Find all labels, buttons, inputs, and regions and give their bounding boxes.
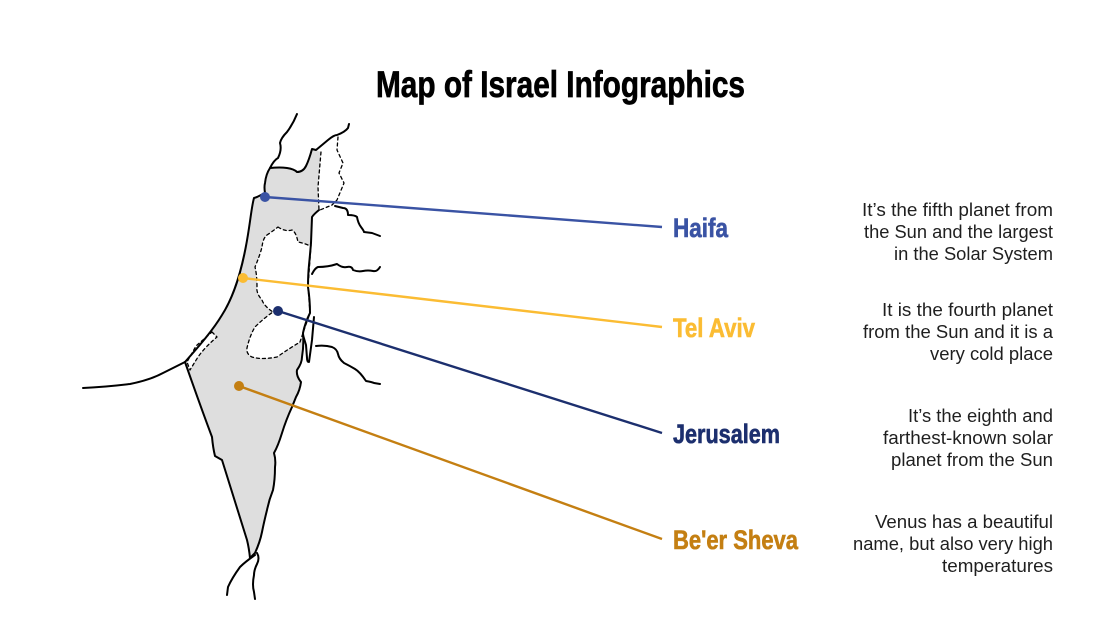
map: Gaza strip — [187, 332, 217, 370]
connector: Haifa — [260, 192, 662, 227]
map: middle river — [312, 264, 380, 274]
map: Dead Sea — [303, 317, 314, 362]
description: Haifa: in the Solar System — [894, 244, 1053, 264]
description: Haifa — [862, 200, 1053, 264]
title: Map of Israel Infographics — [376, 64, 745, 105]
map: Sinai tip right — [253, 553, 258, 599]
label: Haifa: Haifa — [673, 213, 729, 243]
map: northern river — [335, 206, 380, 236]
description: Haifa: the Sun and the largest — [864, 222, 1053, 242]
connector: Jerusalem — [273, 306, 662, 433]
map: northern border — [270, 114, 349, 172]
connector: Be'er Sheva — [234, 381, 662, 539]
description: Be'er Sheva: temperatures — [942, 556, 1053, 576]
map: Sinai tip left — [227, 555, 255, 595]
label: Tel Aviv: Tel Aviv — [673, 313, 755, 343]
map: eastern border — [185, 210, 319, 558]
map: West Bank — [247, 227, 311, 358]
map: Golan dashed border — [318, 137, 344, 210]
map of Israel — [83, 114, 380, 599]
connector: Tel Aviv — [238, 273, 662, 327]
description: Jerusalem: farthest-known solar — [883, 428, 1053, 448]
description: Tel Aviv — [863, 300, 1054, 364]
description: Jerusalem: It’s the eighth and — [908, 406, 1053, 426]
map: grey territory — [185, 149, 321, 558]
description: Jerusalem: planet from the Sun — [891, 450, 1053, 470]
description: Be'er Sheva: Venus has a beautiful — [875, 512, 1053, 532]
map: Egypt border — [83, 362, 185, 388]
label: Be'er Sheva: Be'er Sheva — [673, 525, 799, 555]
map: southern river — [316, 346, 380, 384]
description: Tel Aviv: from the Sun and it is a — [863, 322, 1054, 342]
map: coast and southern border — [185, 168, 270, 362]
description: Tel Aviv: It is the fourth planet — [882, 300, 1053, 320]
description: Haifa: It’s the fifth planet from — [862, 200, 1053, 220]
label: Jerusalem: Jerusalem — [673, 419, 780, 449]
description: Tel Aviv: very cold place — [930, 344, 1053, 364]
description: Be'er Sheva: name, but also very high — [853, 534, 1053, 554]
description: Be'er Sheva — [853, 512, 1053, 576]
description: Jerusalem — [883, 406, 1053, 470]
